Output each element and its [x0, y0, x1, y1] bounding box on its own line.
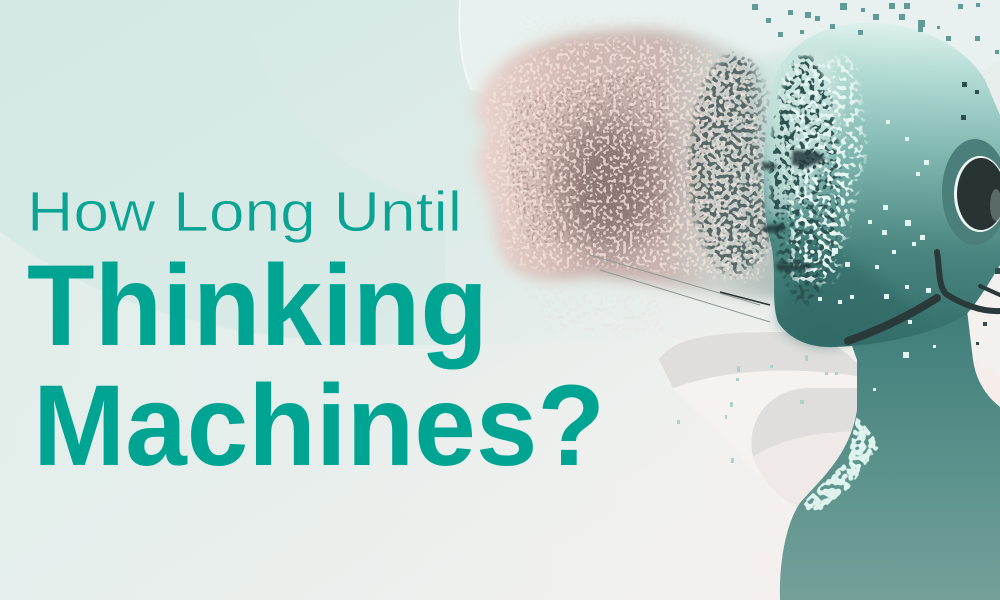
dark core — [558, 117, 662, 253]
ear ring — [942, 139, 1000, 245]
robot head — [755, 23, 1000, 600]
body and neck — [780, 310, 1000, 600]
stray pink particles top — [500, 0, 720, 50]
cheek shade — [778, 230, 920, 346]
teal flecks over bowls — [677, 355, 838, 463]
title line 2: Thinking — [27, 242, 488, 370]
face fragmentation fade — [755, 40, 840, 220]
loose particles — [677, 3, 1000, 463]
dark particles right of head — [961, 82, 1000, 345]
eye and mouth dark patches — [762, 150, 826, 271]
face dark fragments — [757, 40, 853, 320]
title — [27, 180, 605, 490]
brown speckles — [485, 45, 690, 270]
stray pink particles — [490, 265, 690, 350]
headset strap — [848, 252, 1000, 341]
bowl shapes — [659, 332, 870, 520]
body highlight speckles — [798, 412, 882, 516]
particle cloud: dissolving pink face — [465, 0, 795, 350]
streak lines — [590, 255, 770, 322]
teal particles above head — [752, 3, 999, 54]
cloud base — [475, 29, 795, 300]
light speckles — [465, 21, 790, 300]
title line 3: Machines? — [33, 362, 605, 490]
dark grey speckles — [667, 30, 803, 300]
face white fragments — [760, 35, 885, 305]
title line 1: How Long Until — [27, 180, 462, 244]
head shell — [764, 23, 1000, 347]
white particles on head — [818, 120, 936, 391]
transition particles: grey to teal — [590, 30, 803, 322]
